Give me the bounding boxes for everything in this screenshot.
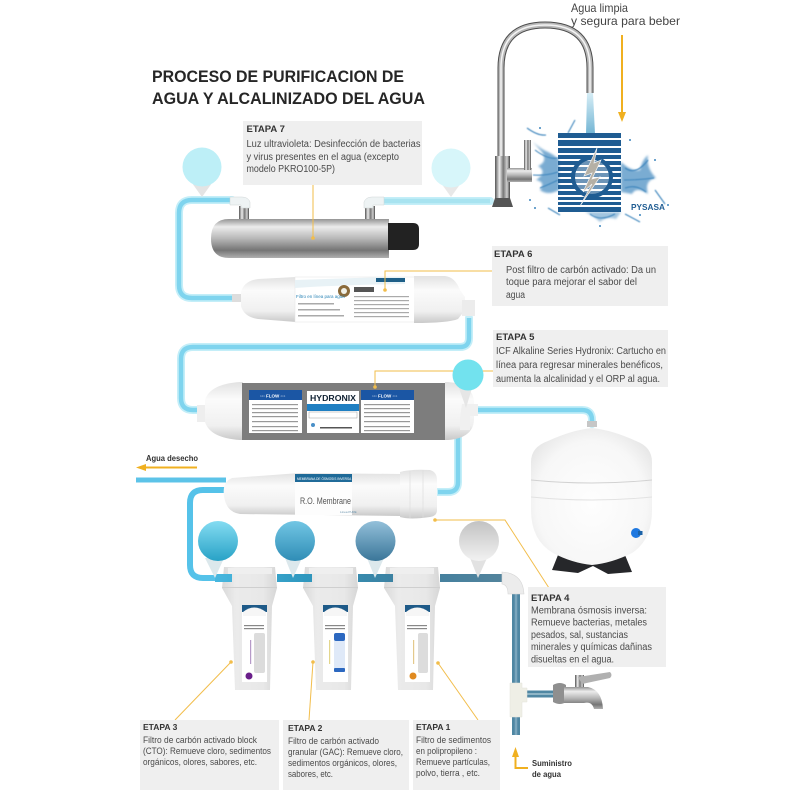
hydronix cartridge: ◦◦◦ FLOW ◦◦◦ [372, 394, 398, 398]
hydronix cartridge: ◦◦◦ FLOW ◦◦◦ [260, 394, 286, 398]
hydronix cartridge: HYDRONIX [310, 394, 357, 403]
bubble: top left [182, 148, 222, 197]
panel: etapa 3: (CTO): Remueve cloro, sedimentos [143, 746, 271, 756]
tank [531, 421, 652, 574]
callout line: etapa 4 [433, 518, 549, 588]
bubble: etapa 2 [275, 521, 315, 578]
panel: etapa 1: Filtro de sedimentos [416, 735, 491, 745]
panel: etapa 2: granular (GAC): Remueve cloro, [288, 747, 403, 757]
panel: etapa 5: aumenta la alcalinidad y el ORP al agua. [496, 374, 660, 385]
panel: etapa 1: Remueve partículas, [416, 757, 490, 767]
panel: etapa 6 [492, 246, 668, 306]
post carbon filter: Filtro en línea para agua [296, 294, 345, 299]
text: agua limpia: y segura para beber [571, 14, 680, 28]
logo: pysasa splash: PYSASA [631, 202, 665, 212]
logo: pysasa splash [526, 120, 669, 227]
bubble: etapa 1 [356, 521, 396, 578]
water pipes: filter row and supply [215, 578, 556, 735]
panel: etapa 3: Filtro de carbón activado block [143, 735, 257, 745]
filter housing: etapa 2 [303, 567, 358, 690]
ro membrane [224, 470, 437, 518]
panel: etapa 2 [283, 720, 409, 790]
panel: etapa 4: Remueve bacterias, metales [531, 618, 647, 628]
title: PROCESO DE PURIFICACION DE [152, 68, 404, 86]
text: agua limpia: Agua limpia [571, 1, 628, 15]
title: AGUA Y ALCALINIZADO DEL AGUA [152, 90, 425, 108]
panel: etapa 2: sabores, etc. [288, 769, 333, 779]
panel: etapa 5: ICF Alkaline Series Hydronix: Cartucho en [496, 346, 666, 357]
arrow: suministro [512, 747, 528, 768]
post carbon filter [232, 271, 492, 323]
panel: etapa 1: polvo, tierra , etc. [416, 768, 480, 778]
panel: etapa 3: ETAPA 3 [143, 722, 178, 732]
panel: etapa 7: ETAPA 7 [246, 124, 285, 135]
label: suministro de agua: de agua [532, 769, 561, 779]
panel: etapa 2: sedimentos orgánicos, olores, [288, 758, 397, 768]
panel: etapa 3 [140, 720, 279, 790]
panel: etapa 6: agua [506, 290, 525, 301]
panel: etapa 4: pesados, sal, sustancias [531, 630, 628, 641]
panel: etapa 2: Filtro de carbón activado [288, 736, 379, 746]
panel: etapa 4 [528, 587, 666, 667]
panel: etapa 3: orgánicos, olores, sabores, etc. [143, 757, 257, 767]
panel: etapa 4: minerales y químicas dañinas [531, 642, 652, 653]
panel: etapa 5 [493, 330, 668, 387]
panel: etapa 5: ETAPA 5 [496, 332, 535, 343]
panel: etapa 6: ETAPA 6 [494, 249, 532, 260]
elbow fitting [502, 572, 524, 594]
water pipes: waste and membrane feed [136, 480, 232, 578]
bubble: etapa 3 [198, 521, 238, 578]
panel: etapa 7: modelo PKRO100-5P) [246, 164, 335, 175]
arrow: agua desecho [136, 464, 197, 471]
panel: etapa 6: toque para mejorar el sabor del [506, 277, 637, 288]
water stream [586, 93, 595, 134]
panel: etapa 4: disueltas en el agua. [531, 654, 614, 666]
callout line: etapa 1 [436, 661, 478, 720]
uv sterilizer [211, 185, 419, 258]
bubble: top right [432, 148, 470, 197]
ro membrane: Línea PURE [340, 510, 357, 514]
tee fitting [510, 683, 527, 717]
filter housing: etapa 3 [222, 567, 277, 690]
panel: etapa 7 [243, 121, 422, 185]
label: suministro de agua: Suministro [532, 758, 572, 768]
bubble: suministro [459, 521, 499, 578]
panel: etapa 6: Post filtro de carbón activado: Da un [506, 265, 656, 276]
panel: etapa 5: línea para regresar minerales benéficos, [496, 360, 663, 371]
panel: etapa 1: ETAPA 1 [416, 722, 451, 732]
panel: etapa 1: en polipropileno : [416, 746, 477, 756]
title [152, 68, 425, 108]
text: agua limpia [571, 1, 680, 28]
filter housing: etapa 1 [384, 567, 440, 690]
water pipes: purified line [179, 200, 592, 492]
arrow: clean water [618, 35, 626, 122]
panel: etapa 1 [413, 720, 500, 790]
hydronix cartridge [197, 371, 493, 440]
label: suministro de agua [532, 758, 572, 779]
ro membrane: R.O. Membrane [300, 496, 351, 506]
faucet [492, 25, 590, 207]
panel: etapa 4: ETAPA 4 [531, 593, 570, 604]
bubble: etapa 5 [452, 360, 484, 408]
panel: etapa 7: y virus presentes en el agua (excepto [246, 152, 399, 163]
label: agua desecho: Agua desecho [146, 453, 198, 463]
panel: etapa 4: Membrana ósmosis inversa: [531, 606, 647, 616]
ro membrane: MEMBRANA DE ÓSMOSIS INVERSA [297, 476, 352, 481]
tap [553, 672, 612, 709]
callout line: etapa 3 [175, 660, 233, 720]
panel: etapa 7: Luz ultravioleta: Desinfección de bacterias [246, 139, 420, 150]
callout line: etapa 2 [309, 660, 315, 720]
panel: etapa 2: ETAPA 2 [288, 723, 323, 733]
